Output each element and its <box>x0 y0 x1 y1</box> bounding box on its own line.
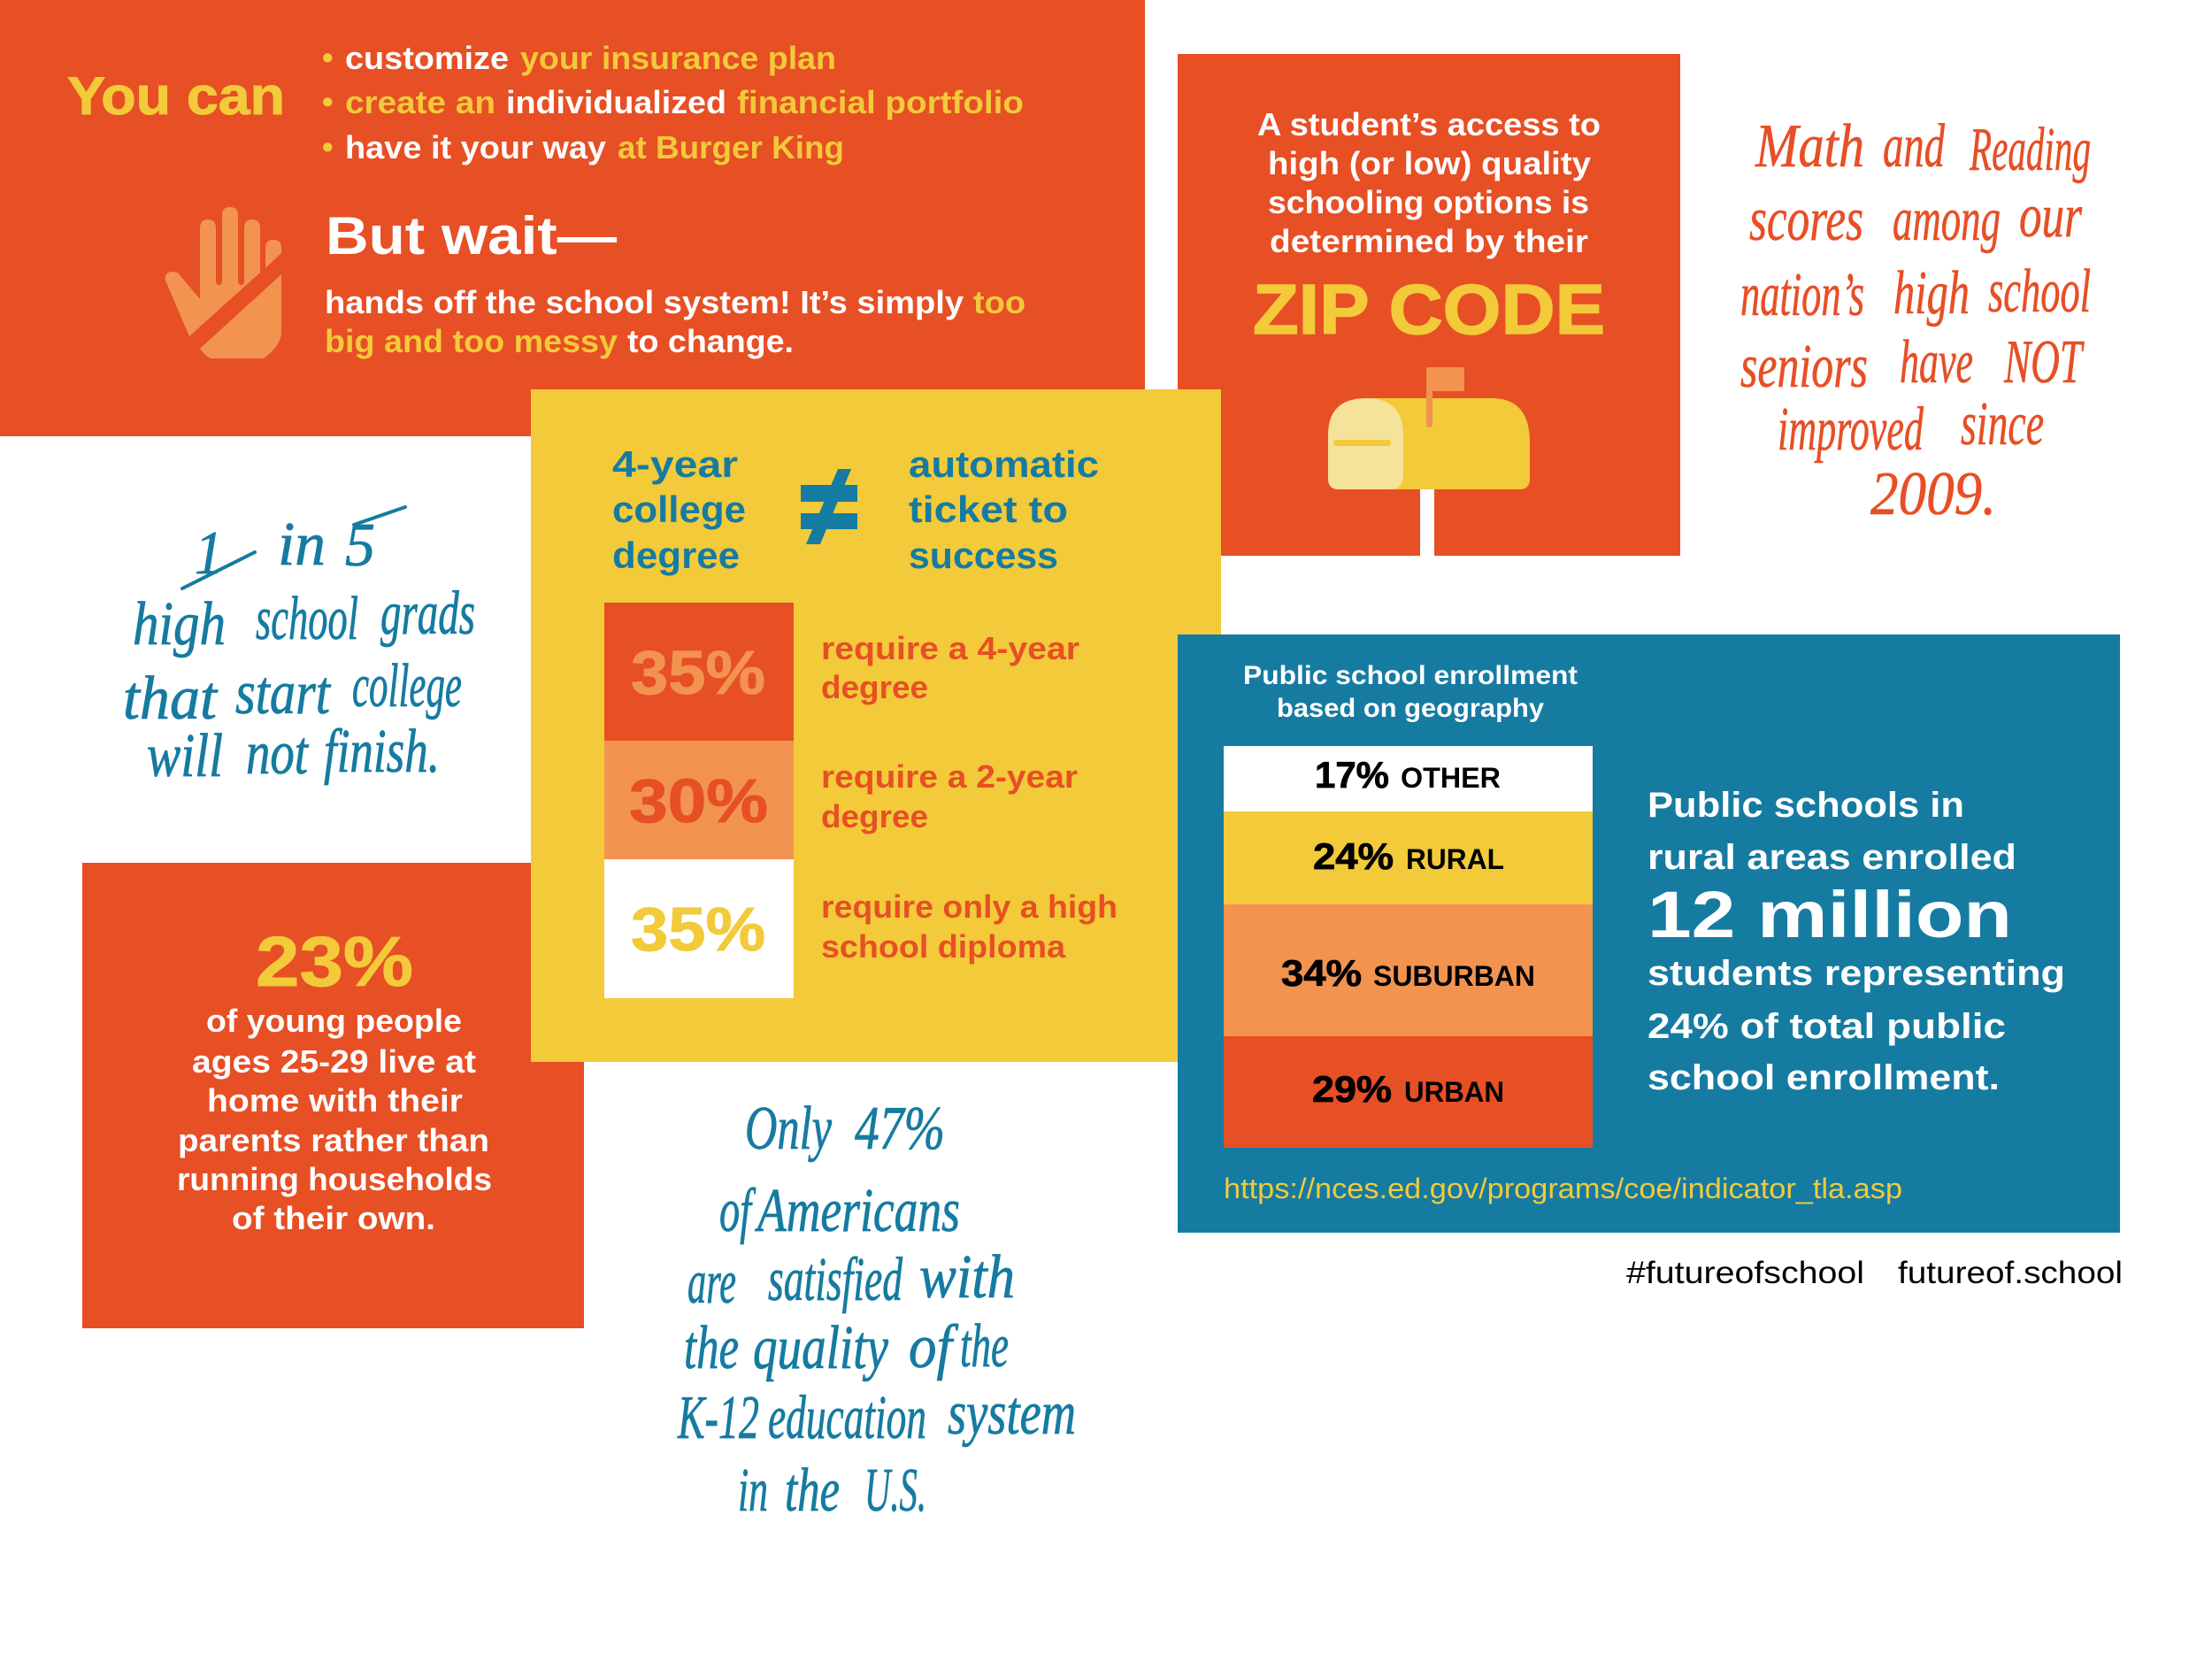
text: 4-year college degree: degree <box>612 534 740 576</box>
text: young people: parents rather than <box>178 1122 489 1158</box>
stacked bar: enrollment by geography: OTHER <box>1401 762 1501 794</box>
handwritten note: only 47%: the <box>684 1314 739 1382</box>
text: young people: running households <box>177 1161 492 1197</box>
bullet list of choices: individualized <box>506 84 726 120</box>
text: automatic ticket to success <box>909 443 1099 576</box>
heading: but wait: But wait— <box>326 206 617 265</box>
text: rural enrollment: students representing <box>1647 954 2065 993</box>
handwritten note: only 47%: system <box>948 1380 1076 1448</box>
stacked bar: enrollment by geography: RURAL <box>1406 843 1504 875</box>
handwritten note: only 47% <box>677 1095 1076 1525</box>
icon: not equal sign <box>801 469 857 544</box>
text: 4-year college degree <box>612 443 746 576</box>
footer: hashtag and site: futureof.school <box>1898 1256 2123 1290</box>
stacked bar: enrollment by geography: 24% <box>1313 835 1394 877</box>
icon: stop hand <box>165 207 281 358</box>
text: automatic ticket to success: ticket to <box>909 488 1068 530</box>
stacked bar: degree requirements <box>604 603 794 998</box>
handwritten note: only 47%: 47% <box>855 1095 945 1163</box>
handwritten note: math and reading: since <box>1961 390 2044 458</box>
handwritten note: math and reading: NOT <box>2003 328 2085 396</box>
bullet list of choices: • <box>322 128 334 165</box>
stacked bar: degree requirements: 35% <box>631 895 765 964</box>
handwritten note: 1 in 5: 1 <box>195 519 223 588</box>
handwritten note: only 47%: satisfied <box>768 1246 903 1314</box>
stacked bar: enrollment by geography: 34% <box>1281 952 1362 994</box>
handwritten note: 1 in 5: school <box>256 585 358 653</box>
bullet list of choices: • <box>322 83 334 119</box>
stacked bar: degree requirements: 30% <box>629 766 768 835</box>
panel: zip code <box>1178 54 1680 556</box>
labels: requirements: require a 4-year <box>821 630 1079 666</box>
handwritten note: math and reading: and <box>1883 112 1946 181</box>
text: automatic ticket to success: success <box>909 534 1058 576</box>
text: hands off: to change. <box>627 323 794 359</box>
bullet list of choices: create an <box>345 84 495 120</box>
bullet list of choices: • <box>322 39 334 75</box>
labels: requirements: school diploma <box>821 928 1066 965</box>
text: rural enrollment: rural areas enrolled <box>1647 838 2016 877</box>
handwritten note: only 47%: the <box>960 1312 1009 1380</box>
text: young people: home with their <box>207 1082 463 1119</box>
stacked bar: enrollment by geography: 29% <box>1312 1068 1392 1110</box>
handwritten note: only 47%: U.S. <box>864 1457 926 1525</box>
bullet list of choices: your insurance plan <box>520 40 836 76</box>
text: young people: of young people <box>206 1003 462 1039</box>
text: rural enrollment <box>1647 786 2065 1097</box>
handwritten note: 1 in 5: start <box>235 659 331 727</box>
handwritten note: only 47%: quality <box>753 1314 889 1382</box>
handwritten note: only 47%: Americans <box>755 1177 960 1245</box>
panel: you can / but wait <box>0 0 1145 436</box>
handwritten note: math and reading: improved <box>1778 396 1924 464</box>
labels: requirements <box>821 630 1118 965</box>
bullet list of choices: customize <box>345 40 509 76</box>
handwritten note: only 47%: Only <box>745 1095 833 1163</box>
handwritten note: only 47%: are <box>687 1249 736 1317</box>
handwritten note: 1 in 5: in <box>278 511 326 579</box>
handwritten note: math and reading: high <box>1893 259 1970 327</box>
handwritten note: math and reading: our <box>2019 182 2083 250</box>
text: hands off: big and too messy <box>325 323 618 359</box>
labels: requirements: require a 2-year <box>821 758 1078 795</box>
text: hands off: hands off the school system! It’s simply <box>325 284 964 320</box>
handwritten note: only 47%: K-12 <box>677 1384 759 1452</box>
chart title: based on geography <box>1277 694 1544 723</box>
source url: https://nces.ed.gov/programs/coe/indicator_tla.asp <box>1224 1173 1902 1204</box>
handwritten note: 1 in 5: college <box>352 652 462 720</box>
stacked bar: degree requirements: 35% <box>631 638 765 707</box>
stat: 23%: 23% <box>256 922 413 1001</box>
handwritten note: only 47%: of <box>909 1313 959 1381</box>
stacked bar: enrollment by geography: 17% <box>1315 754 1389 796</box>
icon: mailbox <box>1328 367 1530 556</box>
text: young people <box>177 1003 492 1236</box>
panel: 23% young people <box>82 863 584 1328</box>
handwritten note: only 47%: in <box>738 1457 768 1525</box>
heading: you can: You can <box>67 66 285 126</box>
text: automatic ticket to success: automatic <box>909 443 1099 485</box>
labels: requirements: degree <box>821 798 928 834</box>
text: student's access: schooling options is <box>1268 184 1589 220</box>
text: hands off <box>325 284 1025 359</box>
labels: requirements: require only a high <box>821 888 1118 925</box>
text: 4-year college degree: college <box>612 488 746 530</box>
text: rural enrollment: 24% of total public <box>1647 1007 2006 1046</box>
handwritten note: math and reading: seniors <box>1740 333 1868 401</box>
bullet list of choices: financial portfolio <box>737 84 1024 120</box>
panel: 4-year college degree <box>531 389 1221 1062</box>
handwritten note: 1 in 5: not <box>246 719 309 788</box>
footer: hashtag and site: #futureofschool <box>1626 1256 1864 1290</box>
handwritten note: 1 in 5: that <box>123 665 219 733</box>
handwritten note: math and reading: nation’s <box>1740 261 1864 329</box>
text: student's access: high (or low) quality <box>1268 145 1591 181</box>
panel: public school enrollment <box>1178 634 2120 1233</box>
text: 4-year college degree: 4-year <box>612 443 738 485</box>
stacked bar: enrollment by geography <box>1224 746 1593 1148</box>
handwritten note: math and reading: 2009. <box>1870 460 1996 528</box>
chart title <box>1243 661 1578 723</box>
handwritten note: math and reading: school <box>1988 258 2091 326</box>
labels: requirements: degree <box>821 669 928 705</box>
handwritten note: math and reading: Reading <box>1969 116 2091 184</box>
handwritten note: 1 in 5: 5 <box>345 511 375 580</box>
chart title: Public school enrollment <box>1243 661 1578 690</box>
text: rural enrollment: school enrollment. <box>1647 1058 2000 1097</box>
text: young people: ages 25-29 live at <box>192 1043 476 1080</box>
text: hands off: too <box>973 284 1025 320</box>
stacked bar: enrollment by geography: URBAN <box>1404 1076 1504 1108</box>
bullet list of choices: at Burger King <box>618 129 844 165</box>
handwritten note: only 47%: the <box>785 1457 840 1525</box>
text: student's access: A student’s access to <box>1257 106 1601 142</box>
handwritten note: math and reading: among <box>1893 186 2001 254</box>
bullet list of choices <box>322 39 1024 165</box>
handwritten note: 1 in 5 <box>123 507 475 790</box>
handwritten note: only 47%: with <box>919 1243 1015 1311</box>
text: student's access <box>1257 106 1601 259</box>
heading: zip code: ZIP CODE <box>1253 270 1605 349</box>
handwritten note: 1 in 5: finish. <box>324 718 440 786</box>
handwritten note: math and reading: have <box>1900 328 1973 396</box>
handwritten note: 1 in 5: will <box>147 722 223 790</box>
handwritten note: 1 in 5: grads <box>380 580 475 648</box>
text: rural enrollment: 12 million <box>1647 878 2012 951</box>
handwritten note: only 47%: education <box>768 1384 926 1452</box>
handwritten note: only 47%: of <box>719 1177 757 1245</box>
text: rural enrollment: Public schools in <box>1647 786 1964 825</box>
handwritten note: math and reading <box>1740 112 2091 528</box>
handwritten note: math and reading: Math <box>1755 112 1864 181</box>
handwritten note: 1 in 5: high <box>133 590 226 658</box>
handwritten note: math and reading: scores <box>1749 186 1863 254</box>
stacked bar: enrollment by geography: SUBURBAN <box>1373 960 1535 992</box>
footer: hashtag and site <box>1626 1256 2123 1290</box>
text: young people: of their own. <box>232 1200 435 1236</box>
bullet list of choices: have it your way <box>345 129 606 165</box>
text: student's access: determined by their <box>1270 223 1588 259</box>
